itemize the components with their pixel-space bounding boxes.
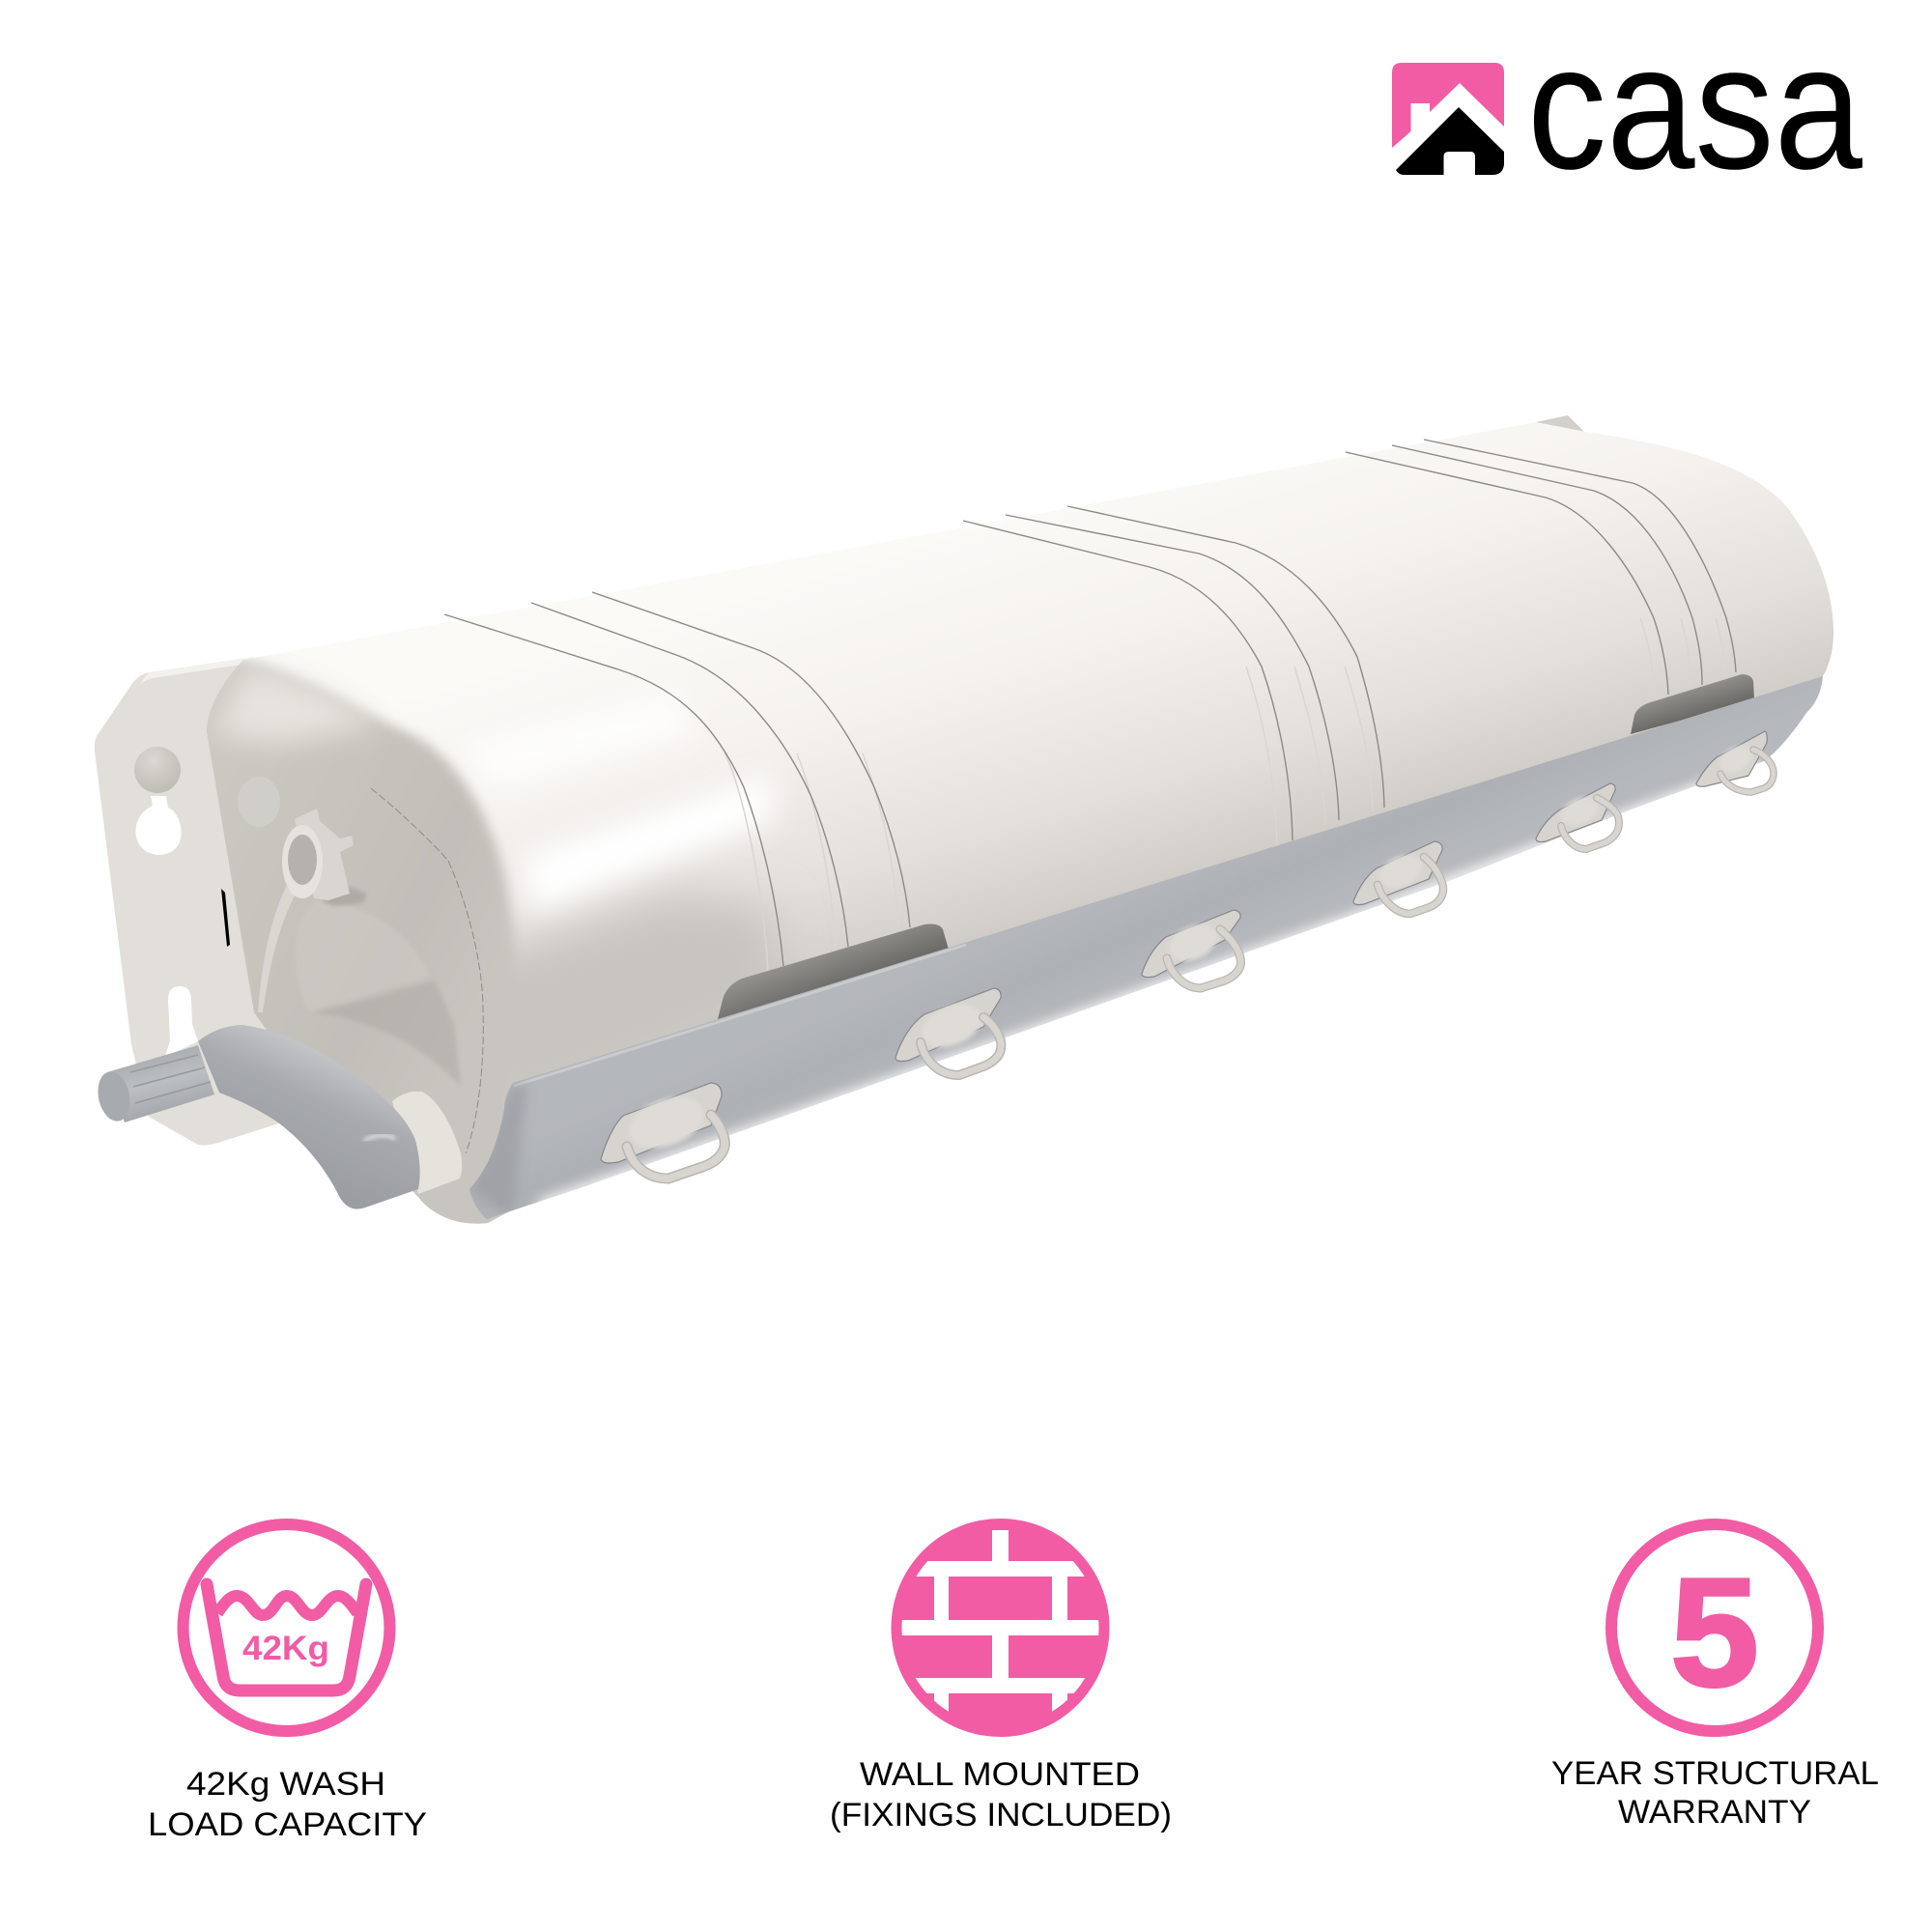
- shadowed round patch: [238, 777, 280, 827]
- handle arm: [198, 1025, 420, 1209]
- black slit: [221, 889, 230, 947]
- icon: logo house: [1396, 107, 1504, 175]
- icon: logo roof square: [1392, 63, 1504, 148]
- hanging hook 6: [1696, 731, 1774, 792]
- bottom shade of left dome: [514, 882, 781, 1076]
- handle axle: [392, 1092, 462, 1194]
- winding handle: [94, 1025, 462, 1209]
- bracket ball screw: [134, 747, 181, 793]
- lower hub fan: [296, 900, 430, 1012]
- hanging hook 5: [1536, 783, 1619, 849]
- icon: number 5 in ring: 5: [1670, 1546, 1759, 1719]
- icon: wash tub in ring: [184, 1524, 390, 1731]
- faint seam lines: [724, 618, 1725, 971]
- cord post: [282, 809, 354, 900]
- upper face light patch: [213, 667, 382, 744]
- hanging hook 4: [1353, 841, 1443, 914]
- bracket keyhole: [135, 796, 182, 855]
- label: warranty: WARRANTY: [1618, 1794, 1811, 1831]
- lower translucent hub: [310, 980, 461, 1087]
- end face: [207, 658, 516, 1224]
- icon: wash tub in ring: 42Kg: [242, 1630, 329, 1667]
- body shell: [184, 422, 1833, 1246]
- label: wall mounted: WALL MOUNTED: [860, 1756, 1140, 1793]
- hanging hook 3: [1142, 910, 1240, 988]
- label: fixings included: (FIXINGS INCLUDED): [830, 1797, 1172, 1833]
- logo wordmark: casa: [1527, 7, 1863, 206]
- bracket lower slot: [164, 986, 198, 1058]
- top tab: [1536, 415, 1586, 434]
- cord strap: [258, 881, 298, 1012]
- icon: brick wall: [889, 1519, 1111, 1737]
- hanging hook 1: [601, 1083, 724, 1179]
- feature: 5 year structural warranty: [1551, 1524, 1879, 1831]
- handle knob: [94, 1045, 214, 1124]
- icon: number 5 in ring: [1611, 1524, 1818, 1731]
- feature: wall mounted: [830, 1519, 1172, 1833]
- handle highlight: [365, 1135, 394, 1140]
- cord post shadow: [321, 887, 367, 906]
- dome highlights: [522, 773, 773, 913]
- feature: 42Kg wash load capacity: [148, 1524, 427, 1843]
- product: wall mounted retractable clothesline: [94, 415, 1833, 1246]
- logo: casa: [1392, 7, 1863, 206]
- label: 42Kg wash: 42Kg WASH: [186, 1766, 385, 1803]
- body recess notch left: [718, 924, 949, 1019]
- face details: [238, 777, 483, 1153]
- body recess notch right: [1631, 674, 1754, 734]
- label: year structural: YEAR STRUCTURAL: [1551, 1755, 1879, 1792]
- label: load capacity: LOAD CAPACITY: [148, 1806, 427, 1843]
- wall bracket: [95, 657, 319, 1146]
- grey base strip: [469, 676, 1823, 1219]
- hanging hook 2: [895, 988, 1001, 1075]
- seam lines: [444, 440, 1736, 966]
- dashed hub arc: [371, 788, 483, 1153]
